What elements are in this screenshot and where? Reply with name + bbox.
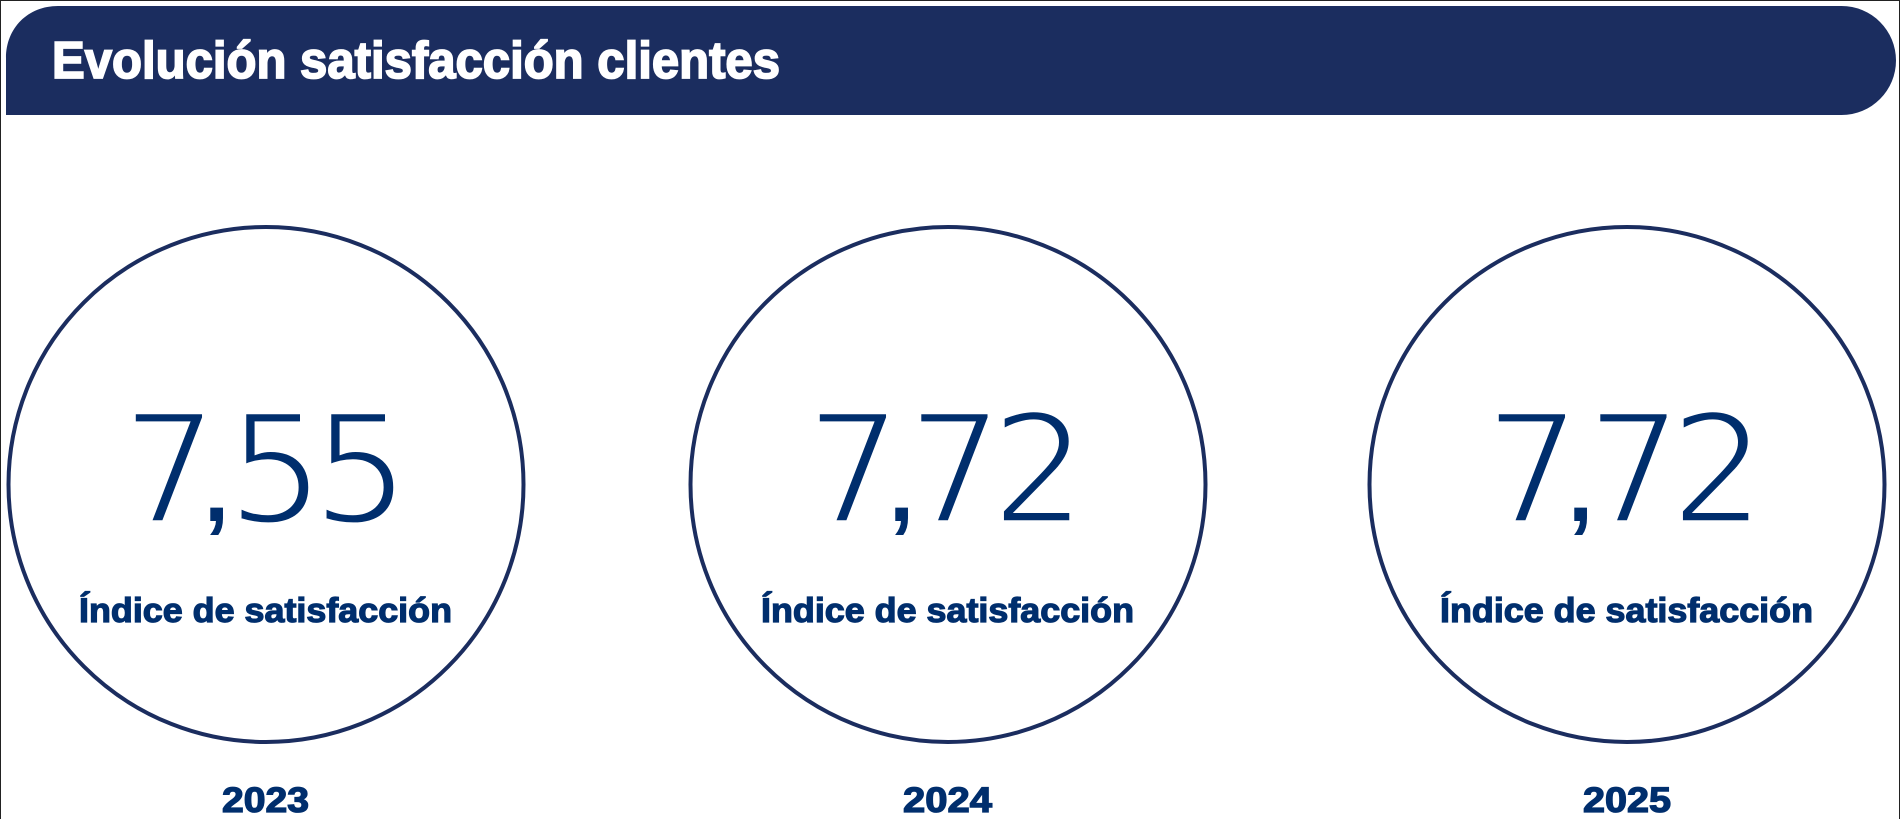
panel: 2023 bbox=[8, 227, 524, 819]
value 2025: 2 bbox=[1669, 382, 1766, 560]
title banner bbox=[6, 6, 1896, 115]
value 2025: 7 bbox=[1484, 382, 1581, 560]
value 2023: 7 bbox=[120, 382, 218, 560]
year 2025: 2025 bbox=[1583, 781, 1671, 819]
value 2024: 7 bbox=[804, 382, 902, 560]
circle 2025 bbox=[1370, 227, 1884, 742]
value 2025: 7 bbox=[1585, 382, 1682, 560]
value 2024: 7 bbox=[906, 382, 1003, 560]
label 2025: Índice de satisfacción bbox=[1440, 592, 1813, 630]
value 2025: , bbox=[1568, 441, 1593, 541]
circle 2023 bbox=[8, 227, 524, 742]
value 2024: , bbox=[889, 441, 914, 541]
value 2023: , bbox=[204, 441, 229, 541]
label 2023: Índice de satisfacción bbox=[79, 592, 452, 630]
title: Evolución satisfacción clientes bbox=[52, 32, 780, 90]
value 2023: 5 bbox=[312, 382, 409, 560]
year 2024: 2024 bbox=[903, 781, 993, 819]
circle 2024 bbox=[690, 227, 1206, 742]
panel: 2025 bbox=[1370, 227, 1884, 819]
label 2024: Índice de satisfacción bbox=[761, 592, 1134, 630]
panel: 2024 bbox=[690, 227, 1206, 819]
year 2023: 2023 bbox=[222, 781, 309, 819]
value 2023: 5 bbox=[227, 382, 324, 560]
value 2024: 2 bbox=[990, 382, 1087, 560]
